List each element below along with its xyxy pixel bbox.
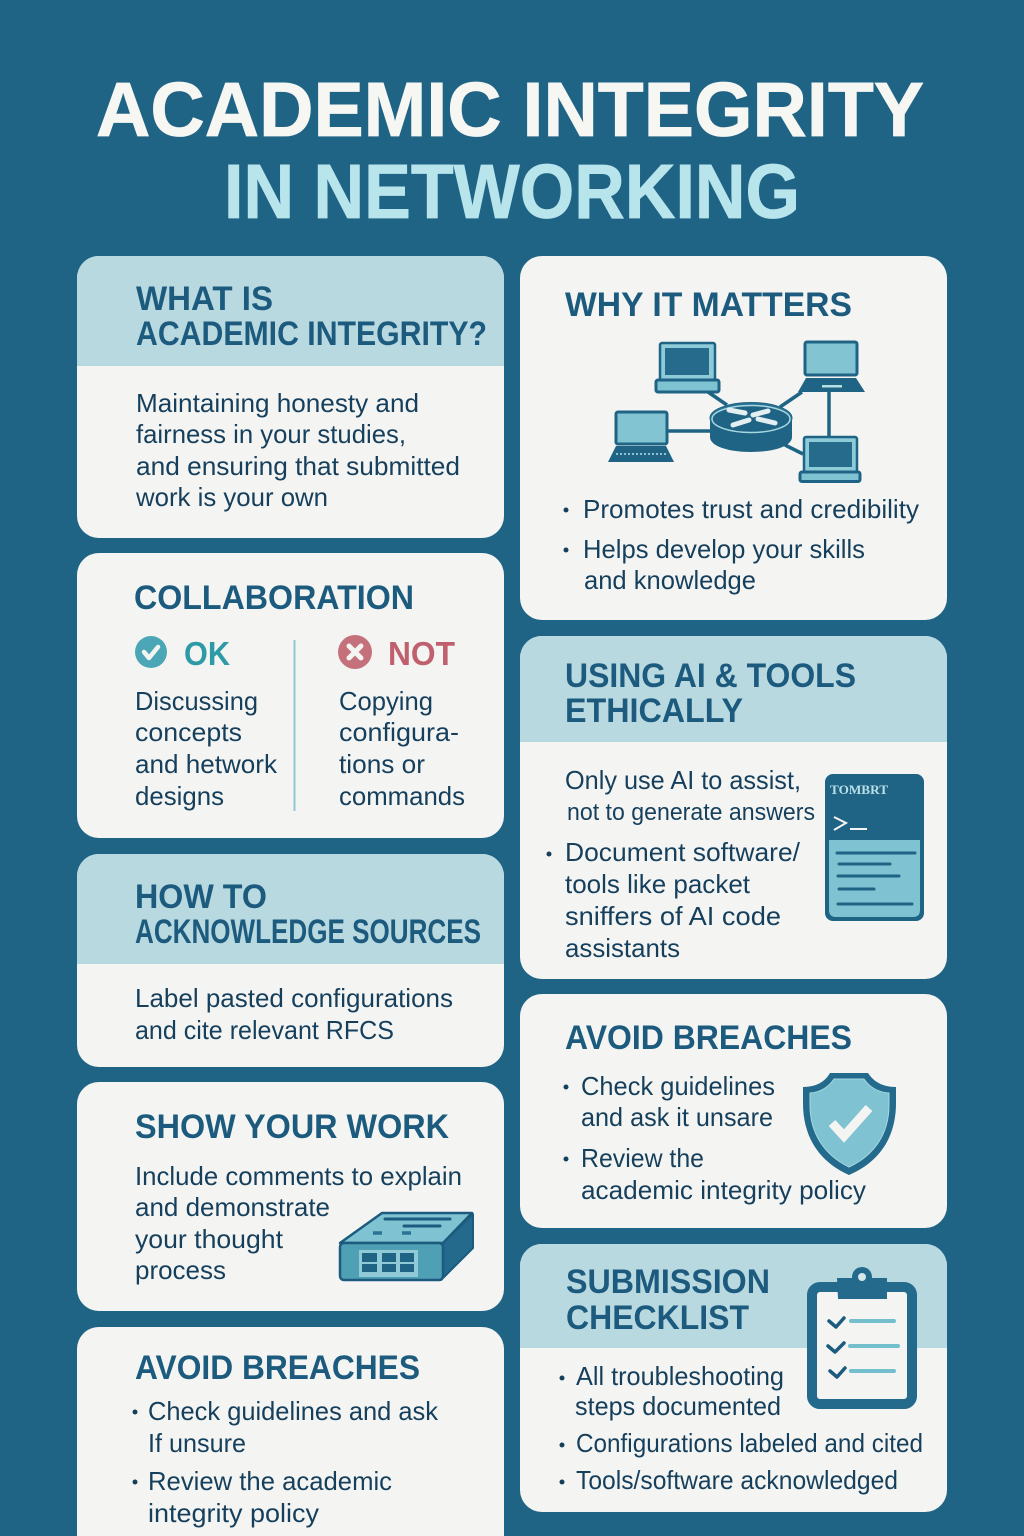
- list: avoid breaches right: [564, 1071, 866, 1205]
- text: ok column: and hetwork: [135, 749, 278, 779]
- list: avoid breaches left: Review the academic: [148, 1466, 392, 1496]
- panel: submission checklist: [520, 1244, 947, 1512]
- heading: what is academic integrity: ACADEMIC INTEGRITY?: [136, 315, 487, 353]
- heading: avoid breaches left: AVOID BREACHES: [135, 1349, 420, 1387]
- list: avoid breaches right: and ask it unsare: [581, 1102, 773, 1132]
- panel: show your work: [77, 1082, 504, 1311]
- heading: using ai and tools: USING AI & TOOLS: [565, 657, 856, 695]
- list: submission checklist: Configurations labeled and cited: [576, 1428, 923, 1458]
- icon: shield check: [803, 1073, 896, 1175]
- text: not column: [339, 686, 465, 811]
- panel: avoid breaches left: [77, 1327, 504, 1536]
- heading: what is academic integrity: [136, 280, 487, 353]
- text: ok column: Discussing: [135, 686, 258, 716]
- heading: using ai and tools: ETHICALLY: [565, 692, 743, 730]
- heading: show your work: SHOW YOUR WORK: [135, 1108, 449, 1146]
- text: not column: tions or: [339, 749, 425, 779]
- text: acknowledge body: [135, 983, 453, 1045]
- list: submission checklist: Tools/software acknowledged: [576, 1465, 898, 1495]
- text: ok column: concepts: [135, 717, 242, 747]
- heading: submission checklist: CHECKLIST: [566, 1299, 749, 1337]
- title: ACADEMIC INTEGRITY: [96, 67, 924, 153]
- text: show your work body: [135, 1161, 462, 1285]
- list: submission checklist: steps documented: [575, 1391, 781, 1421]
- icon: terminal window: TOMBRT: [830, 782, 888, 797]
- heading: submission checklist: SUBMISSION: [566, 1263, 770, 1301]
- text: show your work body: your thought: [135, 1224, 284, 1254]
- title: IN NETWORKING: [224, 149, 800, 235]
- laptop top-right: [798, 342, 865, 392]
- text: not column: Copying: [339, 686, 433, 716]
- router: [710, 402, 792, 452]
- heading: why it matters: WHY IT MATTERS: [565, 286, 852, 324]
- label: ok: OK: [184, 635, 230, 672]
- title: [96, 67, 924, 235]
- icon: not cross: [338, 635, 372, 669]
- list: submission checklist: All troubleshooting: [576, 1361, 784, 1391]
- text: not column: configura-: [339, 717, 459, 747]
- text: show your work body: Include comments to explain: [135, 1161, 462, 1191]
- text: show your work body: and demonstrate: [135, 1192, 330, 1222]
- text: ok column: [135, 686, 278, 811]
- panel: collaboration: [77, 553, 504, 838]
- heading: collaboration: COLLABORATION: [134, 579, 414, 617]
- text: ai guidance: Document software/: [565, 837, 801, 867]
- panel: using ai and tools ethically: [520, 636, 947, 979]
- list: avoid breaches right: Check guidelines: [581, 1071, 775, 1101]
- text: acknowledge body: and cite relevant RFCS: [135, 1015, 394, 1045]
- label: not: NOT: [388, 635, 455, 672]
- text: definition: work is your own: [135, 482, 328, 512]
- list: why it matters: [564, 494, 919, 595]
- text: ai guidance: tools like packet: [565, 869, 751, 899]
- list: submission checklist: [560, 1361, 923, 1495]
- laptop left: [608, 412, 674, 462]
- list: why it matters: and knowledge: [584, 565, 756, 595]
- panel: what is academic integrity: [77, 256, 504, 538]
- text: definition: [135, 388, 460, 512]
- list: avoid breaches left: [132, 1396, 439, 1528]
- icon: clipboard: [812, 1267, 912, 1404]
- list: avoid breaches left: Check guidelines and ask: [148, 1396, 439, 1426]
- text: ai guidance: sniffers of AI code: [565, 901, 781, 931]
- heading: how to acknowledge sources: ACKNOWLEDGE SOURCES: [135, 913, 481, 951]
- text: definition: Maintaining honesty and: [136, 388, 419, 418]
- text: definition: fairness in your studies,: [136, 419, 406, 449]
- heading: how to acknowledge sources: [135, 878, 481, 951]
- laptop top-left: [656, 343, 719, 392]
- text: ai guidance: Only use AI to assist,: [565, 765, 801, 795]
- text: not column: commands: [339, 781, 465, 811]
- heading: what is academic integrity: WHAT IS: [136, 280, 273, 318]
- text: ai guidance: assistants: [565, 933, 680, 963]
- list: avoid breaches right: academic integrity policy: [581, 1175, 866, 1205]
- icon: network diagram: [608, 342, 865, 482]
- panel: how to acknowledge sources: [77, 854, 504, 1067]
- text: show your work body: process: [135, 1255, 226, 1285]
- list: why it matters: Helps develop your skills: [583, 534, 865, 564]
- text: ai guidance: not to generate answers: [567, 799, 815, 826]
- list: avoid breaches left: integrity policy: [148, 1498, 319, 1528]
- heading: avoid breaches right: AVOID BREACHES: [565, 1019, 852, 1057]
- list: avoid breaches right: Review the: [581, 1143, 704, 1173]
- text: ai guidance: [546, 765, 815, 963]
- icon: network switch: [340, 1213, 473, 1280]
- list: why it matters: Promotes trust and credibility: [583, 494, 919, 524]
- panel: avoid breaches right: [520, 994, 947, 1228]
- laptop bottom-right: [800, 437, 860, 482]
- list: avoid breaches left: If unsure: [148, 1428, 246, 1458]
- heading: using ai and tools: [565, 657, 856, 730]
- icon: terminal window: [825, 774, 924, 921]
- text: ok column: designs: [135, 781, 224, 811]
- icon: ok check: [135, 636, 167, 668]
- text: acknowledge body: Label pasted configurations: [135, 983, 453, 1013]
- heading: how to acknowledge sources: HOW TO: [135, 878, 267, 916]
- heading: submission checklist: [566, 1263, 770, 1337]
- panel: why it matters: [520, 256, 947, 620]
- text: definition: and ensuring that submitted: [136, 451, 460, 481]
